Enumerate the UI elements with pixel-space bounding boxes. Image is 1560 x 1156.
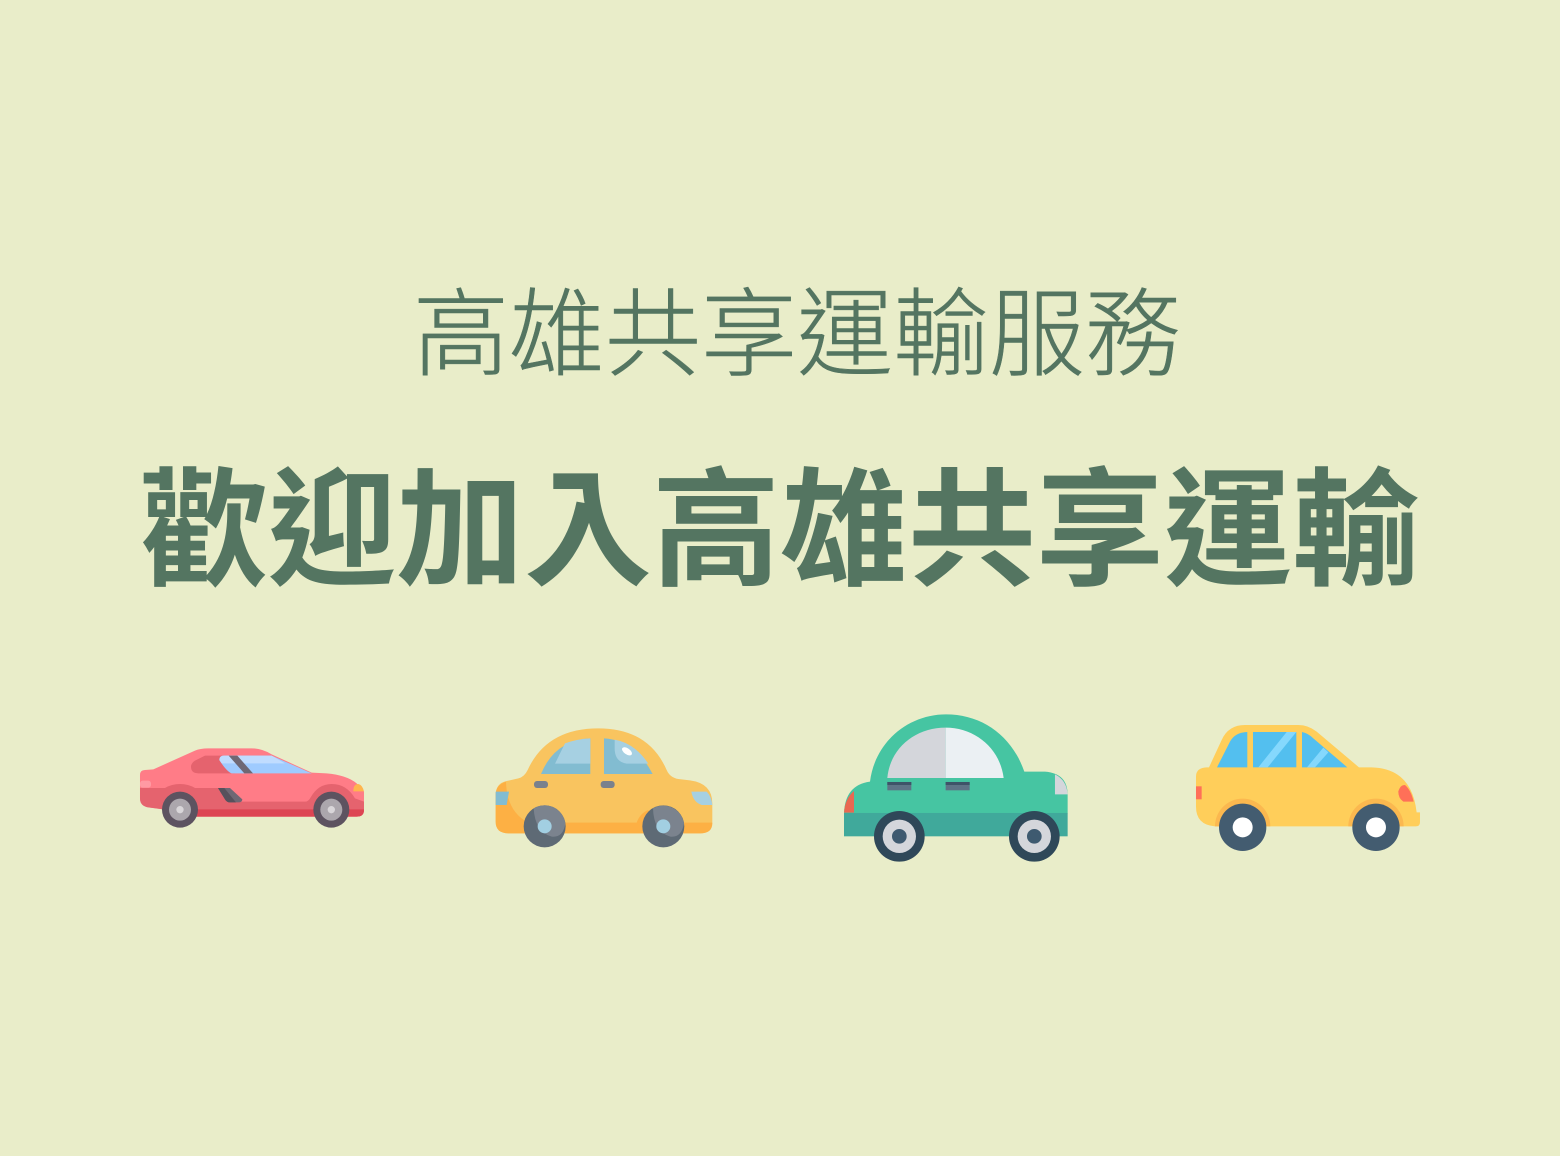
icon: green compact car: [844, 714, 1068, 862]
icon: red sports car: [140, 748, 364, 828]
icon: orange beetle car: [496, 728, 712, 847]
subtitle: 高雄共享運輸服務: [413, 282, 1181, 389]
icon: yellow hatchback car: [1196, 725, 1420, 851]
main title: 歡迎加入高雄共享運輸: [140, 460, 1420, 603]
